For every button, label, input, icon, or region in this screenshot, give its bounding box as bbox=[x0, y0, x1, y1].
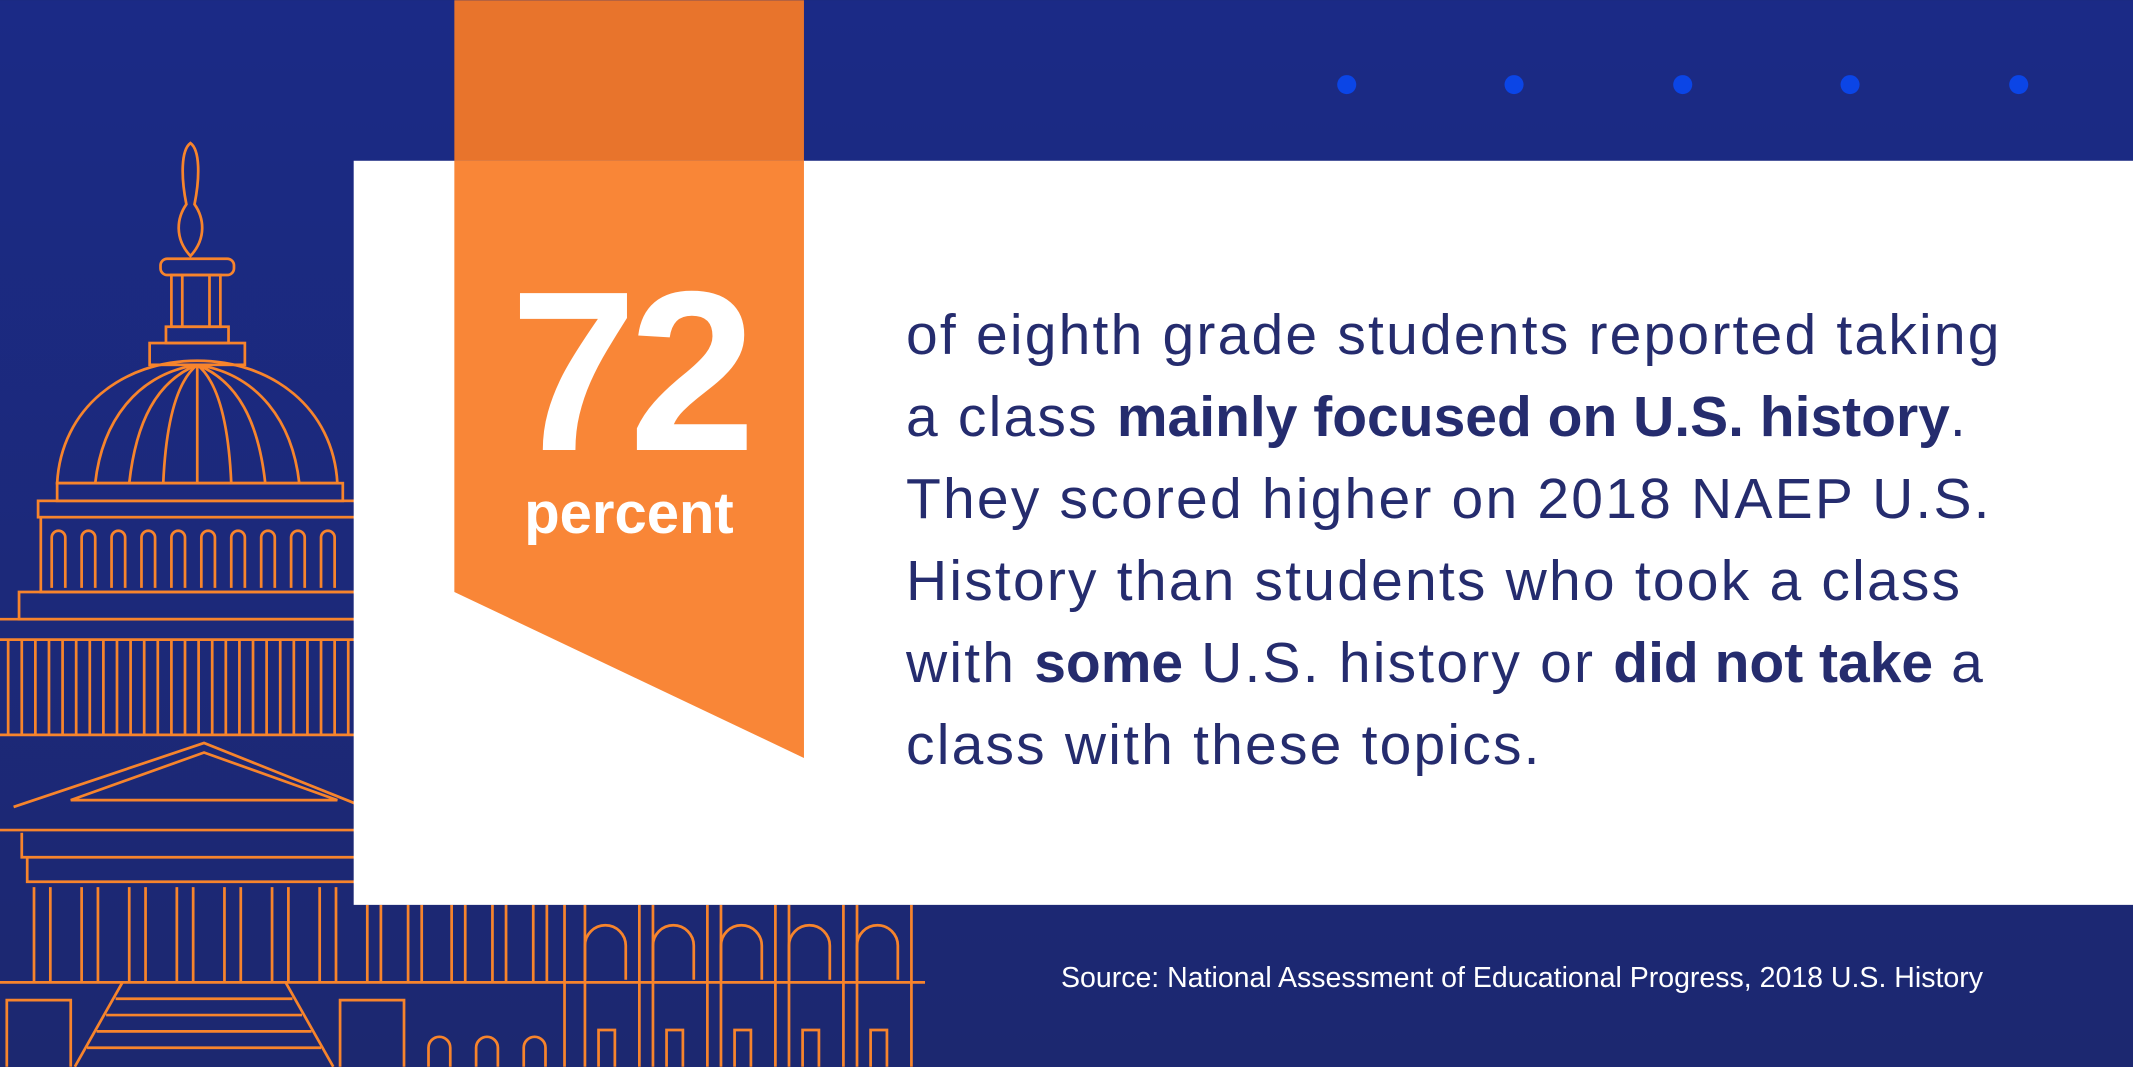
white panel bbox=[354, 161, 2133, 905]
body text: class with these topics. bbox=[906, 713, 1542, 777]
body text: History than students who took a class bbox=[906, 549, 1962, 613]
decorative dots bbox=[1337, 75, 2028, 94]
stat number: percent bbox=[524, 481, 734, 546]
body text bbox=[906, 303, 2002, 777]
body text: They scored higher on 2018 NAEP U.S. bbox=[906, 467, 1992, 531]
orange ribbon bbox=[454, 0, 804, 758]
capitol building bbox=[0, 143, 925, 1067]
stat number: 72 bbox=[510, 245, 748, 499]
source: Source: National Assessment of Educational Progress, 2018 U.S. History bbox=[1061, 962, 1983, 994]
body text: a class mainly focused on U.S. history. bbox=[906, 385, 1968, 449]
body text: with some U.S. history or did not take a bbox=[906, 631, 1985, 695]
body text: of eighth grade students reported taking bbox=[906, 303, 2002, 367]
